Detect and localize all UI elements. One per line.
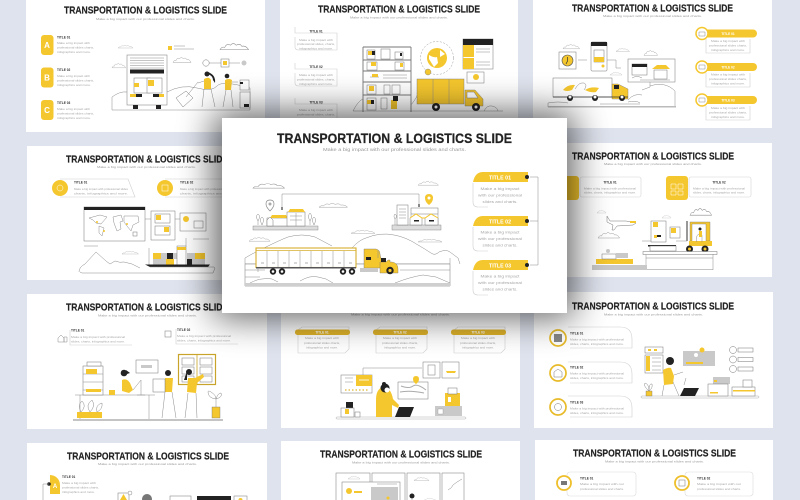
panel: slide lower middle, online tracking (281, 290, 520, 428)
title cards: Make a big impact with (305, 337, 340, 340)
title cards: slides, charts, infographics and more. (71, 340, 125, 344)
title cards: professional slides charts, (304, 342, 340, 345)
title cards with connector: with our professional (478, 237, 522, 241)
title cards with connector: with our professional (478, 281, 522, 285)
heading: TRANSPORTATION & LOGISTICS SLIDE (66, 302, 228, 314)
title items: Make a big impact with our (580, 483, 624, 486)
title cards with connector: with our professional (478, 194, 522, 198)
title cards (295, 27, 337, 121)
item C: Make a big impact with (57, 108, 91, 111)
title cards: TITLE 01 (309, 30, 323, 34)
title items: slides, charts, infographics and more. (570, 412, 624, 415)
panel: slide bottom left (27, 443, 267, 500)
title items: Make a big impact with professional (570, 408, 625, 410)
title cards: infographics and more. (384, 346, 416, 350)
item A: infographics and more. (57, 51, 91, 54)
title items: TITLE 02 (570, 366, 584, 370)
title cards with connector (473, 172, 538, 295)
title cards: infographics and more. (306, 346, 338, 350)
subheading: Make a big impact with our professional slides and charts. (96, 17, 195, 21)
title cards: professional slides charts, (382, 342, 418, 345)
title cards (58, 328, 238, 345)
title items: Make a big impact with professional (570, 372, 625, 376)
title cards: Make a big impact with (299, 74, 334, 77)
title cards with connector: Make a big impact (480, 230, 521, 234)
illustration: partial panels (118, 491, 247, 500)
item C: TITLE 03 (57, 101, 71, 105)
title items: Make a big impact with our (697, 483, 741, 486)
panel: slide lower right, desk and laptop (534, 292, 773, 428)
title cards: TITLE 03 (309, 100, 323, 104)
panel: slide top right, delivery app (533, 0, 772, 128)
title cards: Make a big impact with professional slides (74, 188, 129, 191)
title item (43, 475, 99, 500)
illustration: framed scenes (336, 473, 464, 500)
item A: A (44, 41, 50, 50)
title cards: charts, infographics and more. (180, 192, 234, 196)
pill items: Make a big impact with (711, 40, 746, 43)
title cards (52, 179, 240, 197)
title cards with connector: slides and charts. (482, 244, 518, 248)
subheading: Make a big impact with our professional slides and charts. (605, 460, 704, 464)
panel: slide top left, delivery team (26, 0, 265, 132)
pill items: infographics and more. (711, 49, 745, 52)
title items: TITLE 03 (570, 400, 584, 404)
title cards: charts, infographics and more. (74, 192, 128, 196)
title items (550, 327, 632, 417)
title cards: infographics and more. (299, 48, 333, 50)
title item: professional slides charts, (62, 486, 99, 490)
heading: TRANSPORTATION & LOGISTICS SLIDE (573, 448, 736, 460)
title items: slides, charts, infographics and more. (570, 343, 624, 346)
panel: slide middle left, world map and ship (27, 146, 267, 280)
heading: TRANSPORTATION & LOGISTICS SLIDE (572, 302, 734, 312)
illustration: clock, phone, shop and truck (548, 42, 676, 108)
title cards: TITLE 02 (309, 65, 323, 69)
title items: TITLE 01 (580, 476, 594, 480)
title cards: professional slides, charts, (297, 43, 335, 46)
title cards: TITLE 02 (712, 180, 726, 184)
title cards: Make a big impact with (383, 337, 418, 340)
item C: professional slides charts, (57, 112, 94, 116)
item B: B (44, 74, 50, 82)
title cards: Make a big impact with professional (584, 188, 637, 190)
pill items: professional slides charts, (709, 44, 747, 48)
panel: slide bottom middle (281, 441, 520, 500)
item C (41, 100, 94, 120)
illustration: woman at laptop with shipment panels (336, 362, 466, 419)
illustration: map, panels and cargo ship (79, 207, 215, 273)
illustration: route between depots and yellow truck (245, 181, 460, 286)
title items: professional slides and charts. (697, 488, 741, 491)
subheading: Make a big impact with our professional slides and charts. (352, 460, 450, 464)
subheading: Make a big impact with our professional slides and charts. (603, 14, 702, 18)
title item: infographics and more. (62, 491, 95, 494)
heading: TRANSPORTATION & LOGISTICS SLIDE (572, 152, 734, 162)
panel: slide middle right, forklift and plane (533, 143, 772, 277)
illustration: logistics office (73, 354, 223, 420)
subheading: Make a big impact with our professional slides and charts. (350, 16, 448, 20)
title cards: Make a big impact with professional slides (180, 188, 235, 191)
title items: TITLE 02 (697, 476, 711, 480)
title cards: Make a big impact with (299, 109, 334, 112)
item A (41, 35, 94, 55)
title cards: TITLE 01 (74, 180, 88, 184)
title cards with connector: slides and charts. (482, 200, 518, 204)
heading: TRANSPORTATION & LOGISTICS SLIDE (66, 154, 228, 166)
item A: TITLE 01 (57, 36, 71, 40)
subheading: Make a big impact with our professional slides and charts. (98, 314, 197, 318)
pill items: TITLE 01 (721, 32, 735, 36)
title cards: TITLE 03 (471, 330, 485, 334)
panel: slide top middle, warehouse and truck (280, 0, 518, 132)
pill items (696, 28, 757, 120)
title item: TITLE 01 (62, 475, 76, 479)
title cards: slides, charts, infographics and more. (177, 340, 231, 342)
item C: C (44, 106, 50, 115)
item B: professional slides charts, (57, 80, 94, 82)
title items: professional slides and charts. (580, 488, 624, 491)
title cards with connector: TITLE 03 (489, 264, 511, 270)
panel: slide lower left, office team (27, 294, 267, 429)
item B: infographics and more. (57, 84, 91, 87)
title cards: Make a big impact with (461, 337, 496, 340)
title cards: TITLE 02 (177, 328, 191, 332)
title cards with connector: slides and charts. (482, 288, 518, 292)
title item: A (53, 484, 58, 490)
pill items: professional slides charts, (709, 78, 747, 81)
illustration: truck rear and couriers (112, 44, 250, 110)
title cards with connector: TITLE 01 (489, 176, 511, 182)
subheading: Make a big impact with our professional slides and charts. (97, 165, 196, 169)
title cards: TITLE 01 (315, 330, 329, 334)
pill items: infographics and more. (711, 116, 745, 119)
panel: featured centre slide (222, 118, 567, 313)
title cards: Make a big impact with (299, 39, 334, 42)
title cards: infographics and more. (462, 346, 494, 350)
title cards: TITLE 01 (71, 328, 85, 332)
shadow behind featured slide (214, 112, 574, 318)
title cards: Make a big impact with professional (71, 336, 126, 339)
title cards with connector: TITLE 02 (489, 220, 511, 226)
title cards (560, 176, 751, 200)
title cards: professional slides, charts, (297, 114, 335, 116)
item B: TITLE 02 (57, 68, 71, 72)
title cards: infographics and more. (299, 83, 333, 86)
title cards: TITLE 01 (603, 180, 617, 184)
pill items: professional slides charts, (709, 112, 747, 114)
pill items: TITLE 02 (721, 66, 735, 70)
title cards: Make a big impact with professional (693, 188, 746, 190)
heading: TRANSPORTATION & LOGISTICS SLIDE (64, 6, 227, 16)
title items: slides, charts, infographics and more. (570, 377, 624, 380)
title cards: slides, charts, infographics and more. (584, 192, 636, 194)
subheading: Make a big impact with our professional slides and charts. (323, 147, 466, 152)
title cards with connector: Make a big impact (480, 274, 521, 278)
panel: slide bottom right (535, 440, 773, 500)
heading: TRANSPORTATION & LOGISTICS SLIDE (318, 4, 480, 16)
title item: Make a big impact with (62, 482, 97, 485)
pill items: infographics and more. (711, 82, 745, 86)
item A: Make a big impact with (57, 42, 91, 45)
title items: Make a big impact with professional (570, 338, 625, 342)
subheading: Make a big impact with our professional slides and charts. (351, 312, 450, 316)
title items (557, 472, 753, 496)
illustration: worker at desk (641, 346, 759, 398)
title cards: professional slides charts, (460, 342, 496, 345)
item B: Make a big impact with (57, 75, 91, 78)
heading: TRANSPORTATION & LOGISTICS SLIDE (572, 4, 733, 14)
heading: TRANSPORTATION & LOGISTICS SLIDE (67, 452, 229, 462)
title cards with connector: Make a big impact (480, 187, 521, 191)
item B (41, 68, 94, 88)
item C: infographics and more. (57, 117, 91, 120)
heading: TRANSPORTATION & LOGISTICS SLIDE (277, 131, 512, 146)
illustration: plane, ship, dock and forklift (592, 209, 717, 270)
pill items: Make a big impact with (711, 107, 746, 110)
pill items: Make a big impact with (711, 74, 746, 76)
title cards: slides, charts, infographics and more. (693, 192, 745, 194)
subheading: Make a big impact with our professional slides and charts. (98, 462, 197, 466)
title cards (295, 327, 506, 353)
subheading: Make a big impact with our professional slides and charts. (604, 162, 702, 166)
illustration: shelving, globe, checklist and truck (353, 39, 503, 112)
heading: TRANSPORTATION & LOGISTICS SLIDE (320, 450, 482, 460)
pill items: TITLE 03 (721, 98, 735, 102)
subheading: Make a big impact with our professional slides and charts. (604, 312, 703, 316)
item A: professional slides charts, (57, 46, 94, 50)
title cards: TITLE 02 (393, 330, 407, 334)
title items: TITLE 01 (570, 332, 584, 336)
title cards: Make a big impact with professional (177, 335, 232, 338)
title cards: professional slides, charts, (297, 78, 335, 82)
title cards: TITLE 02 (180, 180, 194, 184)
